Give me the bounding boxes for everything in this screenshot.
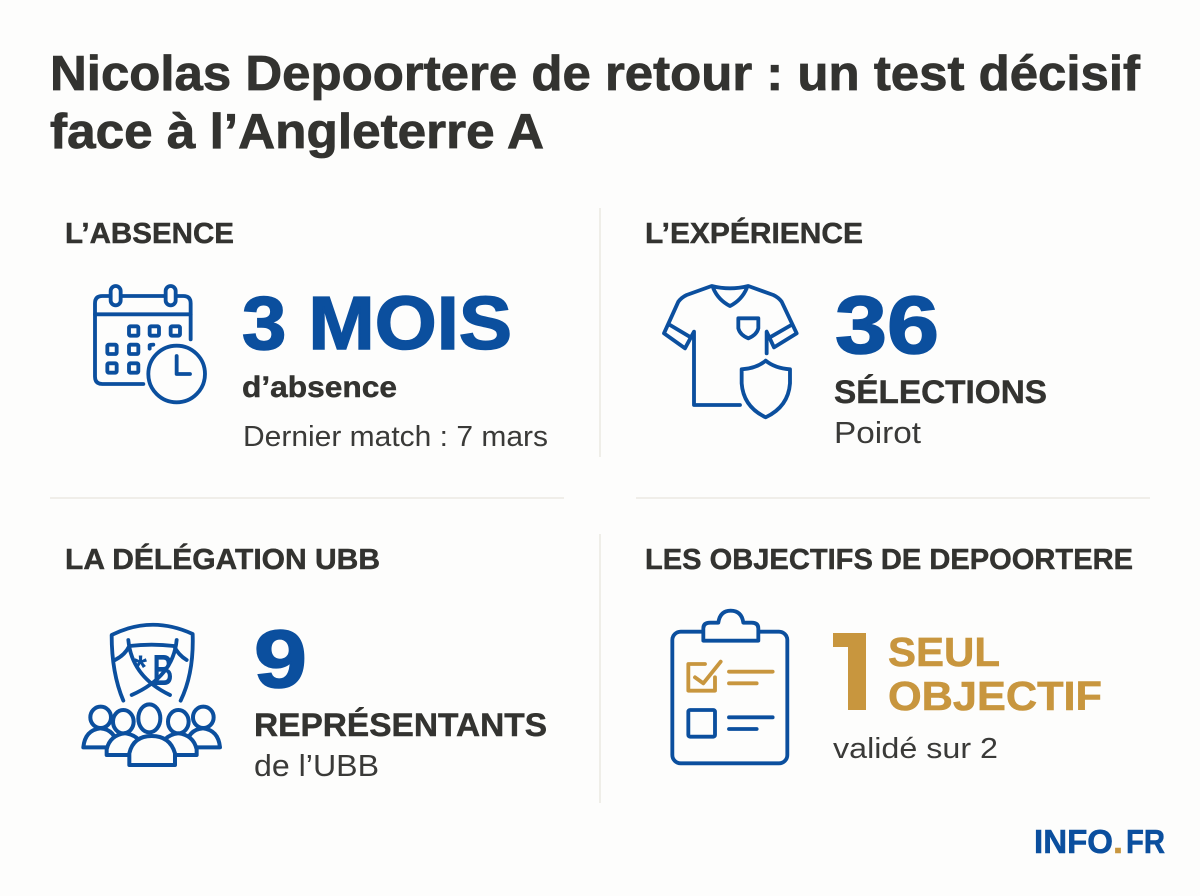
- label: seul objectif: SEUL: [888, 629, 1000, 675]
- note: Poirot: Poirot: [834, 415, 921, 450]
- logo: info.fr: [1034, 823, 1165, 860]
- logo: info.fr: FR: [1126, 823, 1165, 860]
- icon: calendar and clock: [95, 286, 205, 402]
- title: face à l’Angleterre A: [50, 105, 544, 159]
- label: seul objectif: OBJECTIF: [888, 673, 1102, 719]
- big number: 3 mois: 3 MOIS: [242, 281, 512, 365]
- heading: delegation: LA DÉLÉGATION UBB: [65, 542, 380, 576]
- label: d'absence: d’absence: [242, 371, 397, 404]
- big number: 1: [833, 633, 866, 710]
- heading: objectives: LES OBJECTIFS DE DEPOORTERE: [645, 544, 1133, 576]
- panel: objectives: [645, 544, 1133, 765]
- label: selections: SÉLECTIONS: [834, 374, 1047, 410]
- panel: experience: [645, 216, 1047, 450]
- icon: club crest and group: *: [134, 649, 147, 686]
- title: Nicolas Depoortere de retour : un test décisif: [50, 47, 1141, 101]
- panel: delegation: [65, 542, 547, 783]
- big number: 36: 36: [835, 280, 939, 371]
- note: valide sur 2: validé sur 2: [833, 733, 998, 765]
- icon: clipboard checklist: [672, 611, 787, 763]
- icon: club crest and group: [83, 625, 220, 765]
- panel: absence: [65, 218, 548, 453]
- logo: info.fr: .: [1113, 823, 1123, 860]
- note: de l'UBB: de l’UBB: [254, 748, 379, 783]
- heading: experience: L’EXPÉRIENCE: [645, 216, 863, 250]
- label: representants: REPRÉSENTANTS: [254, 707, 547, 743]
- note: last match: Dernier match : 7 mars: [243, 421, 548, 453]
- icon: club crest and group: B: [153, 647, 173, 695]
- big number: 1: 1: [823, 614, 883, 734]
- heading: absence: L’ABSENCE: [65, 218, 234, 250]
- logo: info.fr: INFO: [1034, 823, 1113, 860]
- label: seul objectif: [888, 629, 1102, 719]
- title: [50, 47, 1141, 159]
- big number: 9: 9: [254, 614, 307, 705]
- icon: jersey and shield: [664, 286, 797, 417]
